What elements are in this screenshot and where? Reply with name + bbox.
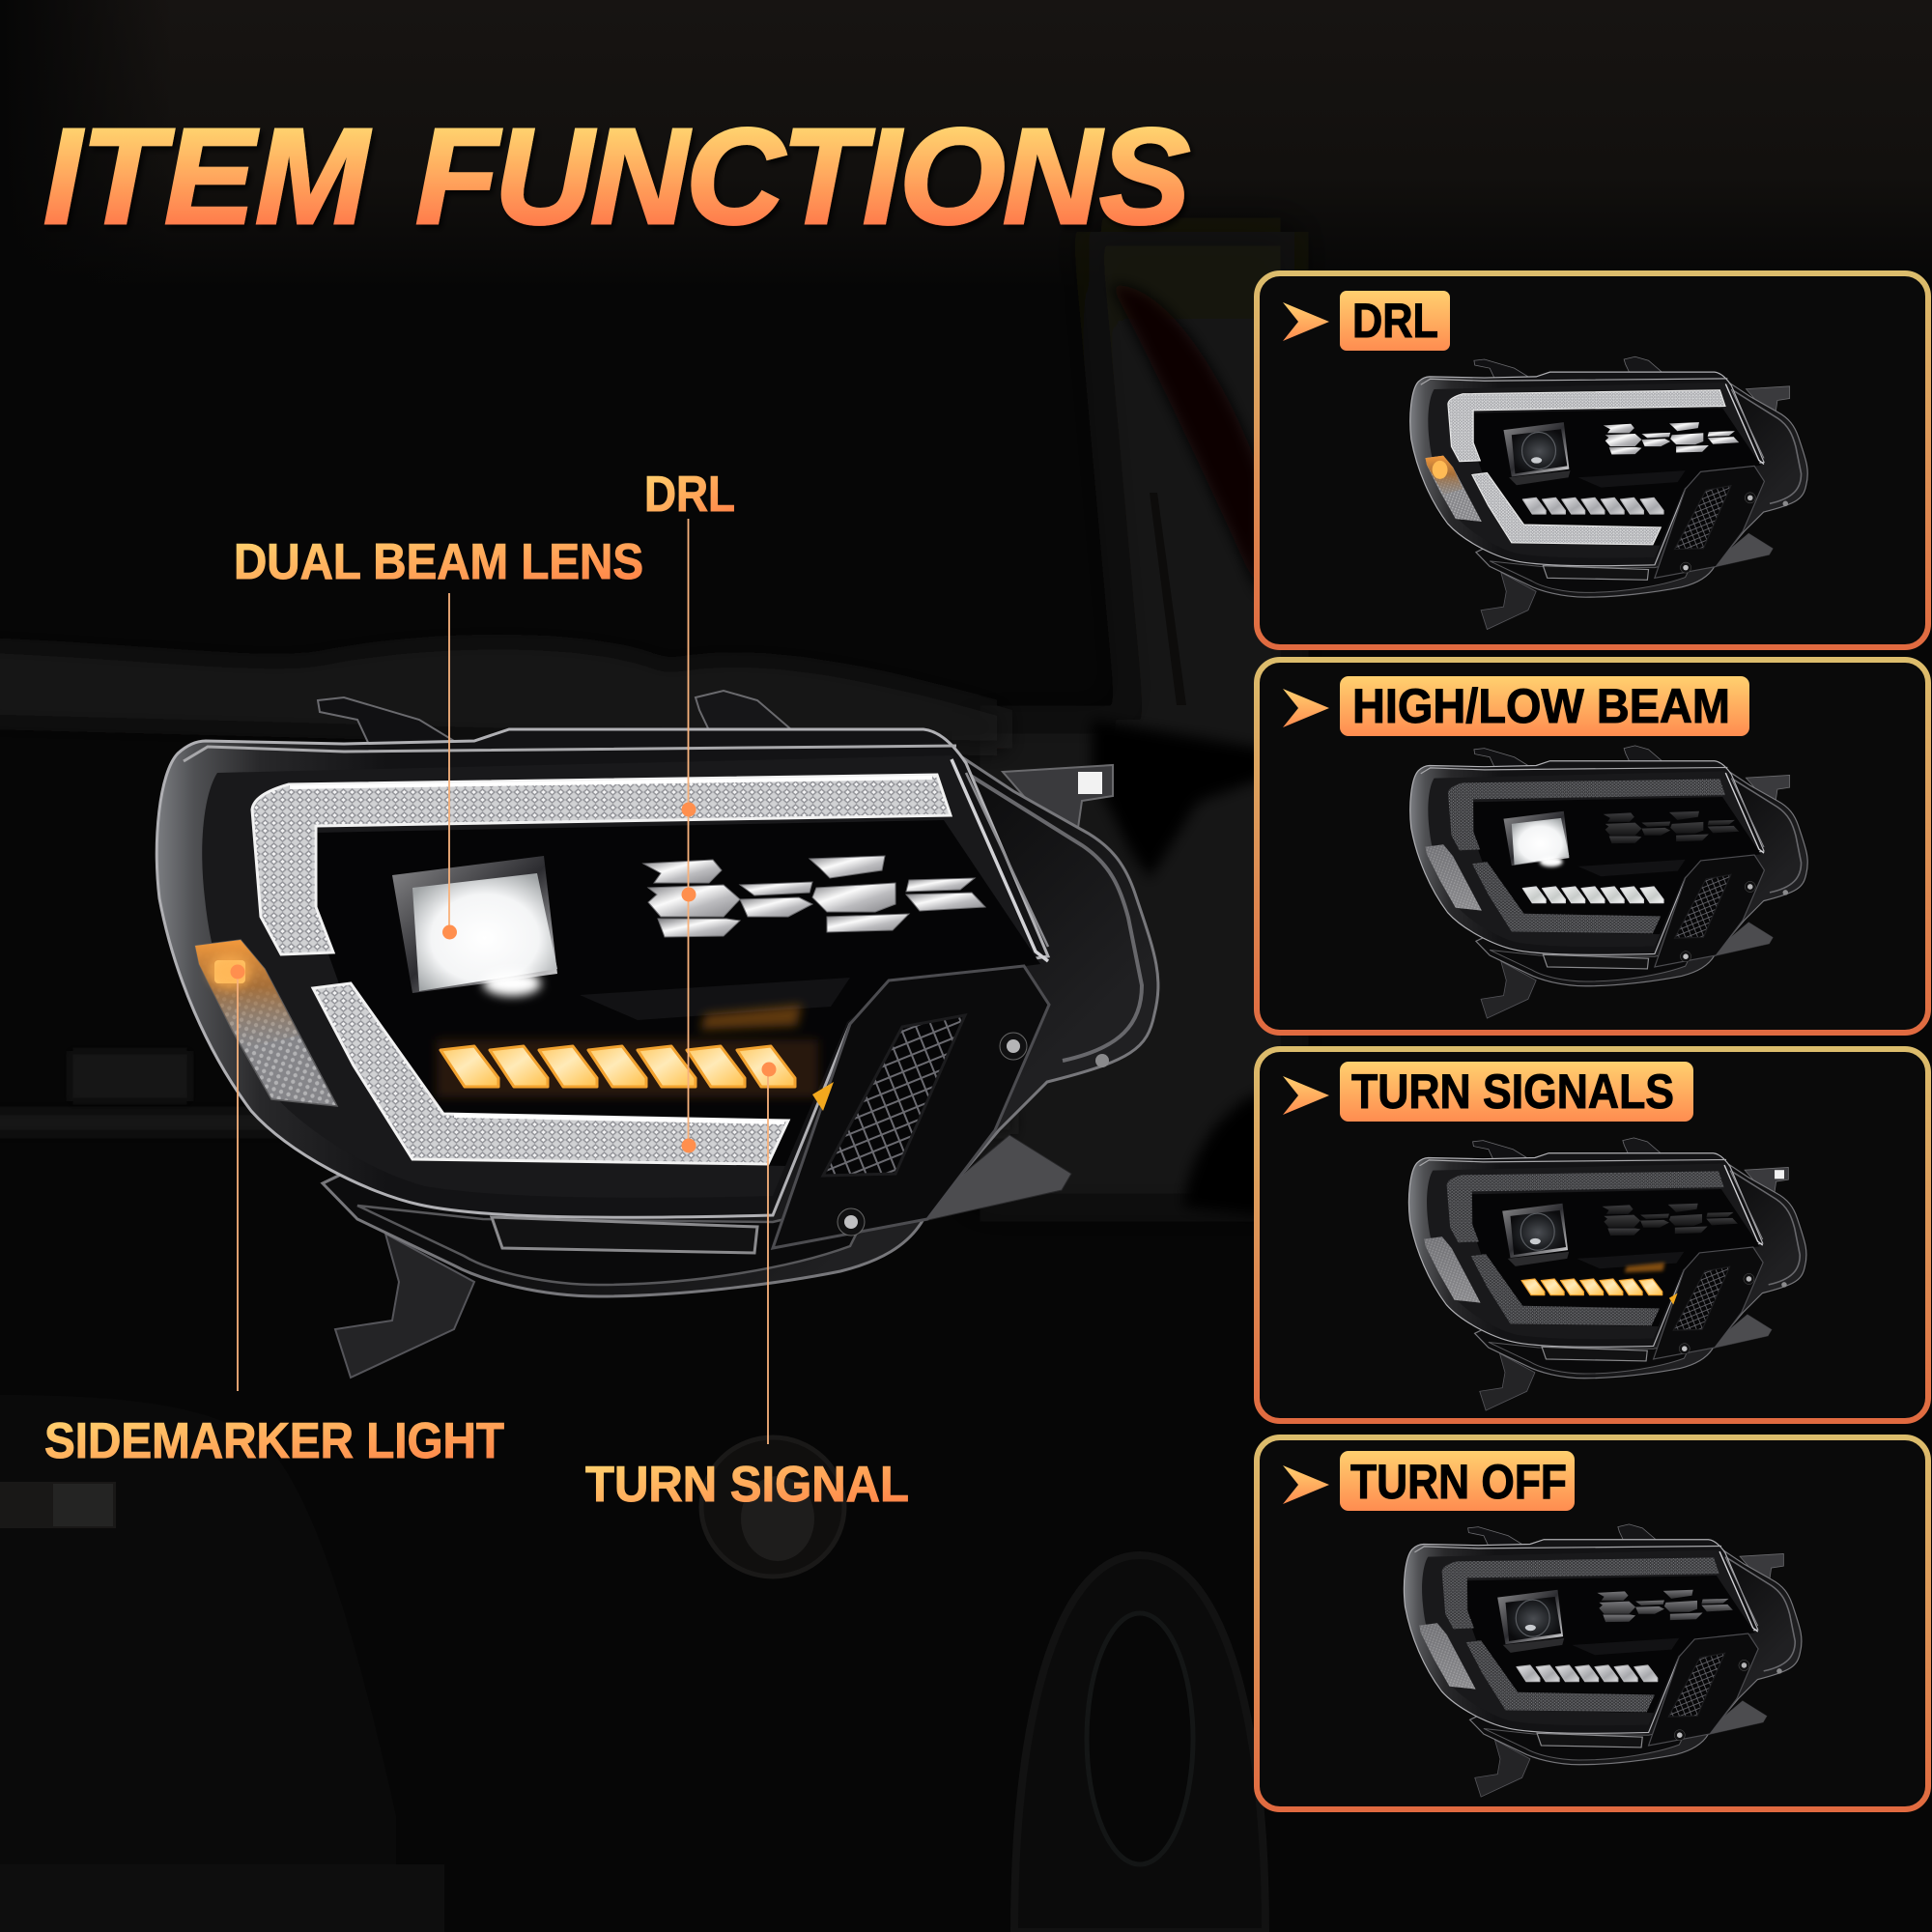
dual beam lens lit — [392, 856, 557, 996]
panel: turn signals — [1257, 1049, 1928, 1421]
panel: DRL — [1257, 273, 1928, 647]
panel: turn off — [1257, 1437, 1928, 1809]
callout: dual beam lens: DUAL BEAM LENS — [234, 534, 643, 590]
headlight: DRL on — [1410, 356, 1807, 630]
amber reflections — [437, 1005, 818, 1097]
badge: turn signals: TURN SIGNALS — [1351, 1065, 1674, 1119]
bracket window — [1078, 772, 1102, 794]
badge: DRL: DRL — [1352, 294, 1438, 348]
panel: high/low beam — [1257, 660, 1928, 1033]
amber arrow tip — [812, 1082, 834, 1111]
badge: high/low beam: HIGH/LOW BEAM — [1352, 679, 1730, 733]
callout: DRL: DRL — [644, 467, 735, 523]
callout: sidemarker light: SIDEMARKER LIGHT — [44, 1413, 504, 1469]
icon: arrow — [1283, 1076, 1329, 1115]
headlight: beam on — [1410, 746, 1807, 1018]
DRL bars lit — [252, 775, 951, 1164]
icon: arrow — [1283, 689, 1329, 727]
callout: turn signal — [585, 1063, 909, 1513]
turn signal segments — [440, 1046, 795, 1087]
callout: DRL — [644, 467, 735, 1153]
callout: sidemarker light — [44, 964, 504, 1469]
callout: dual beam lens — [234, 534, 643, 939]
icon: arrow — [1283, 302, 1329, 341]
headlight: off — [1404, 1524, 1802, 1797]
title: ITEM FUNCTIONS — [43, 99, 1190, 252]
DRL chevron modules — [643, 856, 985, 937]
badge: turn off: TURN OFF — [1350, 1455, 1567, 1509]
callout: turn signal: TURN SIGNAL — [585, 1457, 909, 1513]
main headlight illustration — [156, 691, 1158, 1378]
headlight: turn signals on — [1408, 1138, 1806, 1410]
icon: arrow — [1283, 1465, 1329, 1504]
sidemarker light — [195, 940, 337, 1106]
